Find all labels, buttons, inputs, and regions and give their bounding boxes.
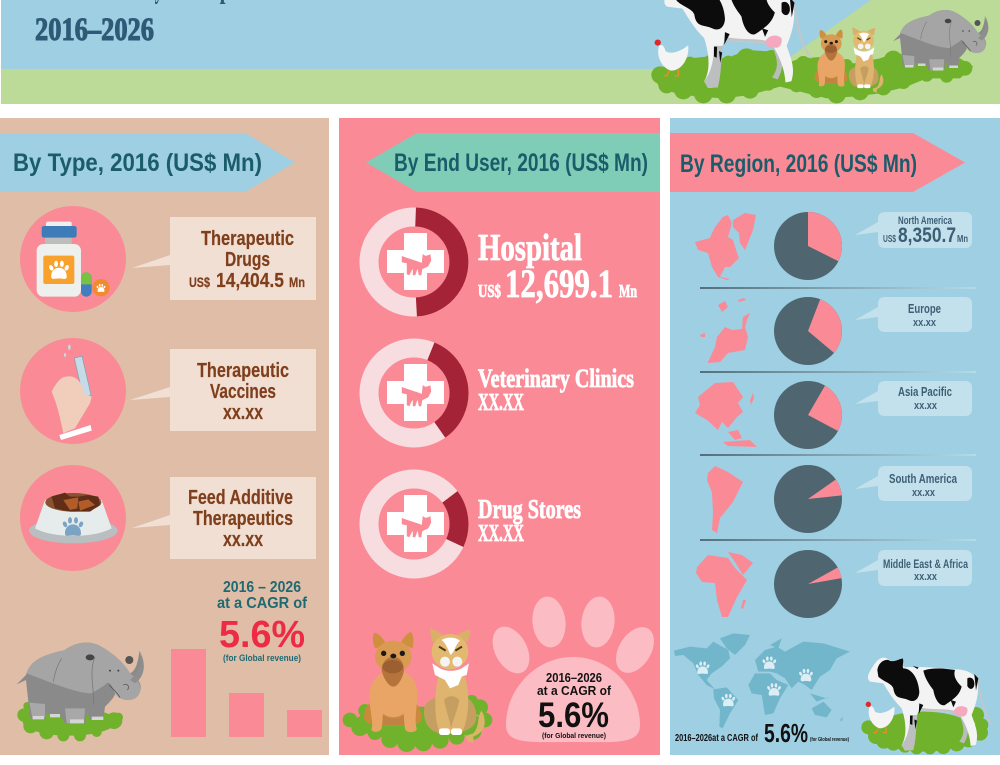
item: therapeutic drugs	[20, 206, 316, 312]
callout box	[132, 217, 316, 300]
callout text	[197, 360, 289, 424]
callout box	[132, 477, 316, 559]
region name: Europe	[908, 301, 941, 316]
value: xx.xx	[223, 529, 263, 551]
unit: US$	[478, 281, 501, 301]
panel: by region	[670, 118, 1000, 755]
donut chart	[369, 217, 459, 307]
panel background	[670, 118, 1000, 755]
icon: chicken	[866, 702, 895, 733]
callout text	[189, 228, 305, 292]
bar chart	[171, 649, 322, 737]
callout box	[855, 550, 972, 586]
icon: hand with syringe	[52, 345, 92, 440]
cagr callout	[217, 579, 308, 663]
item: middle east and africa	[696, 550, 972, 618]
pie chart	[774, 381, 842, 449]
value: xx.xx	[914, 571, 938, 583]
period: 2016–2026	[546, 670, 602, 685]
label: Veterinary Clinics	[478, 364, 634, 393]
value: XX.XX	[478, 521, 524, 547]
panel background	[0, 118, 329, 755]
heading text: By Region, 2016 (US$ Mn)	[680, 150, 917, 178]
icon circle	[20, 206, 126, 312]
header sky	[1, 0, 1000, 69]
item: asia pacific	[695, 381, 972, 449]
note: (for Global revenue)	[223, 653, 301, 663]
map: south america	[707, 466, 743, 533]
panel background	[339, 118, 660, 755]
icon: vet cross	[387, 495, 444, 552]
panel: by end user	[339, 118, 662, 755]
arrow shape	[366, 133, 660, 192]
value: 12,699.1	[505, 261, 613, 306]
item: north america	[695, 212, 972, 280]
arrow shape	[0, 133, 295, 192]
region dividers	[700, 287, 976, 541]
label: Hospital	[478, 227, 582, 269]
region name: North America	[898, 215, 953, 227]
heading arrow	[0, 133, 295, 192]
item: europe	[700, 297, 972, 365]
grass under cow	[861, 707, 988, 754]
panel: by type	[0, 118, 329, 755]
item: drug stores	[369, 479, 581, 569]
value: 14,404.5	[216, 270, 284, 292]
grass under rhino	[17, 702, 123, 741]
unit: Mn	[619, 281, 637, 301]
note: (for Global revenue)	[810, 737, 849, 743]
cagr label: 2016–2026at a CAGR of	[675, 732, 758, 744]
label line 2: Drugs	[225, 249, 270, 271]
donut chart	[369, 479, 459, 569]
callout box	[855, 381, 972, 416]
cagr value: 5.6%	[219, 614, 305, 656]
icon: vet cross	[387, 364, 444, 421]
map: north america	[695, 213, 756, 280]
map: middle east and africa	[696, 552, 753, 617]
callout box	[855, 212, 972, 248]
icon circle	[20, 338, 126, 444]
item: therapeutic vaccines	[20, 338, 316, 444]
heading arrow	[670, 133, 965, 192]
icon: rhino	[893, 10, 988, 71]
heading arrow	[366, 133, 660, 192]
cagr label: at a CAGR of	[217, 595, 308, 612]
region name: South America	[889, 472, 958, 486]
callout box	[855, 297, 972, 332]
item: south america	[707, 465, 972, 533]
donut chart	[369, 348, 459, 438]
pie chart	[774, 212, 842, 280]
label: Feed Additive	[188, 487, 293, 509]
icon: dog and cat	[364, 628, 485, 743]
paw shape	[485, 595, 662, 742]
callout box	[130, 349, 316, 431]
label: Therapeutic	[197, 360, 289, 382]
icon: dog and cat	[815, 27, 883, 93]
value: xx.xx	[914, 400, 938, 412]
item: feed additive therapeutics	[20, 465, 316, 571]
callout text	[188, 487, 293, 551]
item: hospital	[369, 217, 637, 307]
icon: vet cross	[387, 233, 444, 290]
item: veterinary clinics	[369, 348, 634, 438]
cagr value: 5.6%	[538, 696, 609, 735]
icon: rhino	[17, 643, 144, 723]
value: xx.xx	[912, 487, 936, 499]
cagr value: 5.6%	[764, 718, 808, 748]
value: xx.xx	[223, 402, 263, 424]
continents	[674, 633, 850, 728]
heading text: By End User, 2016 (US$ Mn)	[394, 149, 648, 177]
unit: Mn	[957, 234, 968, 245]
region name: Asia Pacific	[898, 385, 952, 399]
grass under pets	[343, 695, 492, 752]
icon: chicken	[655, 39, 688, 76]
value: 8,350.7	[898, 224, 956, 247]
label line 2: Therapeutics	[193, 508, 293, 530]
label: Therapeutic	[201, 228, 294, 250]
arrow shape	[670, 133, 965, 192]
header grass	[651, 48, 973, 103]
label line 2: Vaccines	[210, 381, 276, 403]
map: europe	[700, 298, 750, 363]
title	[35, 0, 355, 48]
value: XX.XX	[478, 390, 524, 416]
icon circle	[20, 465, 126, 571]
pie chart	[774, 297, 842, 365]
value: xx.xx	[913, 317, 937, 329]
icon: food bowl	[29, 493, 118, 543]
icon: paw with cagr	[485, 595, 662, 742]
cagr line	[675, 718, 849, 748]
icon: cow	[868, 658, 993, 751]
unit: US$	[189, 274, 210, 290]
world map	[674, 633, 850, 728]
title years: 2016–2026	[35, 12, 154, 48]
region name: Middle East & Africa	[883, 559, 968, 571]
pie chart	[774, 550, 842, 618]
header banner	[1, 0, 1000, 104]
note: (for Global revenue)	[542, 731, 606, 740]
callout box	[855, 466, 972, 501]
unit: Mn	[289, 274, 305, 290]
unit: US$	[883, 234, 896, 245]
period: 2016 – 2026	[223, 579, 301, 596]
header ground	[1, 0, 1000, 104]
cagr label: at a CAGR of	[537, 683, 612, 698]
icon: cow	[664, 0, 811, 88]
heading text: By Type, 2016 (US$ Mn)	[13, 149, 262, 177]
map: asia pacific	[695, 382, 757, 447]
pie chart	[774, 465, 842, 533]
icon: medicine bottle	[37, 222, 110, 297]
label: Drug Stores	[478, 494, 581, 524]
map paws	[695, 657, 813, 706]
